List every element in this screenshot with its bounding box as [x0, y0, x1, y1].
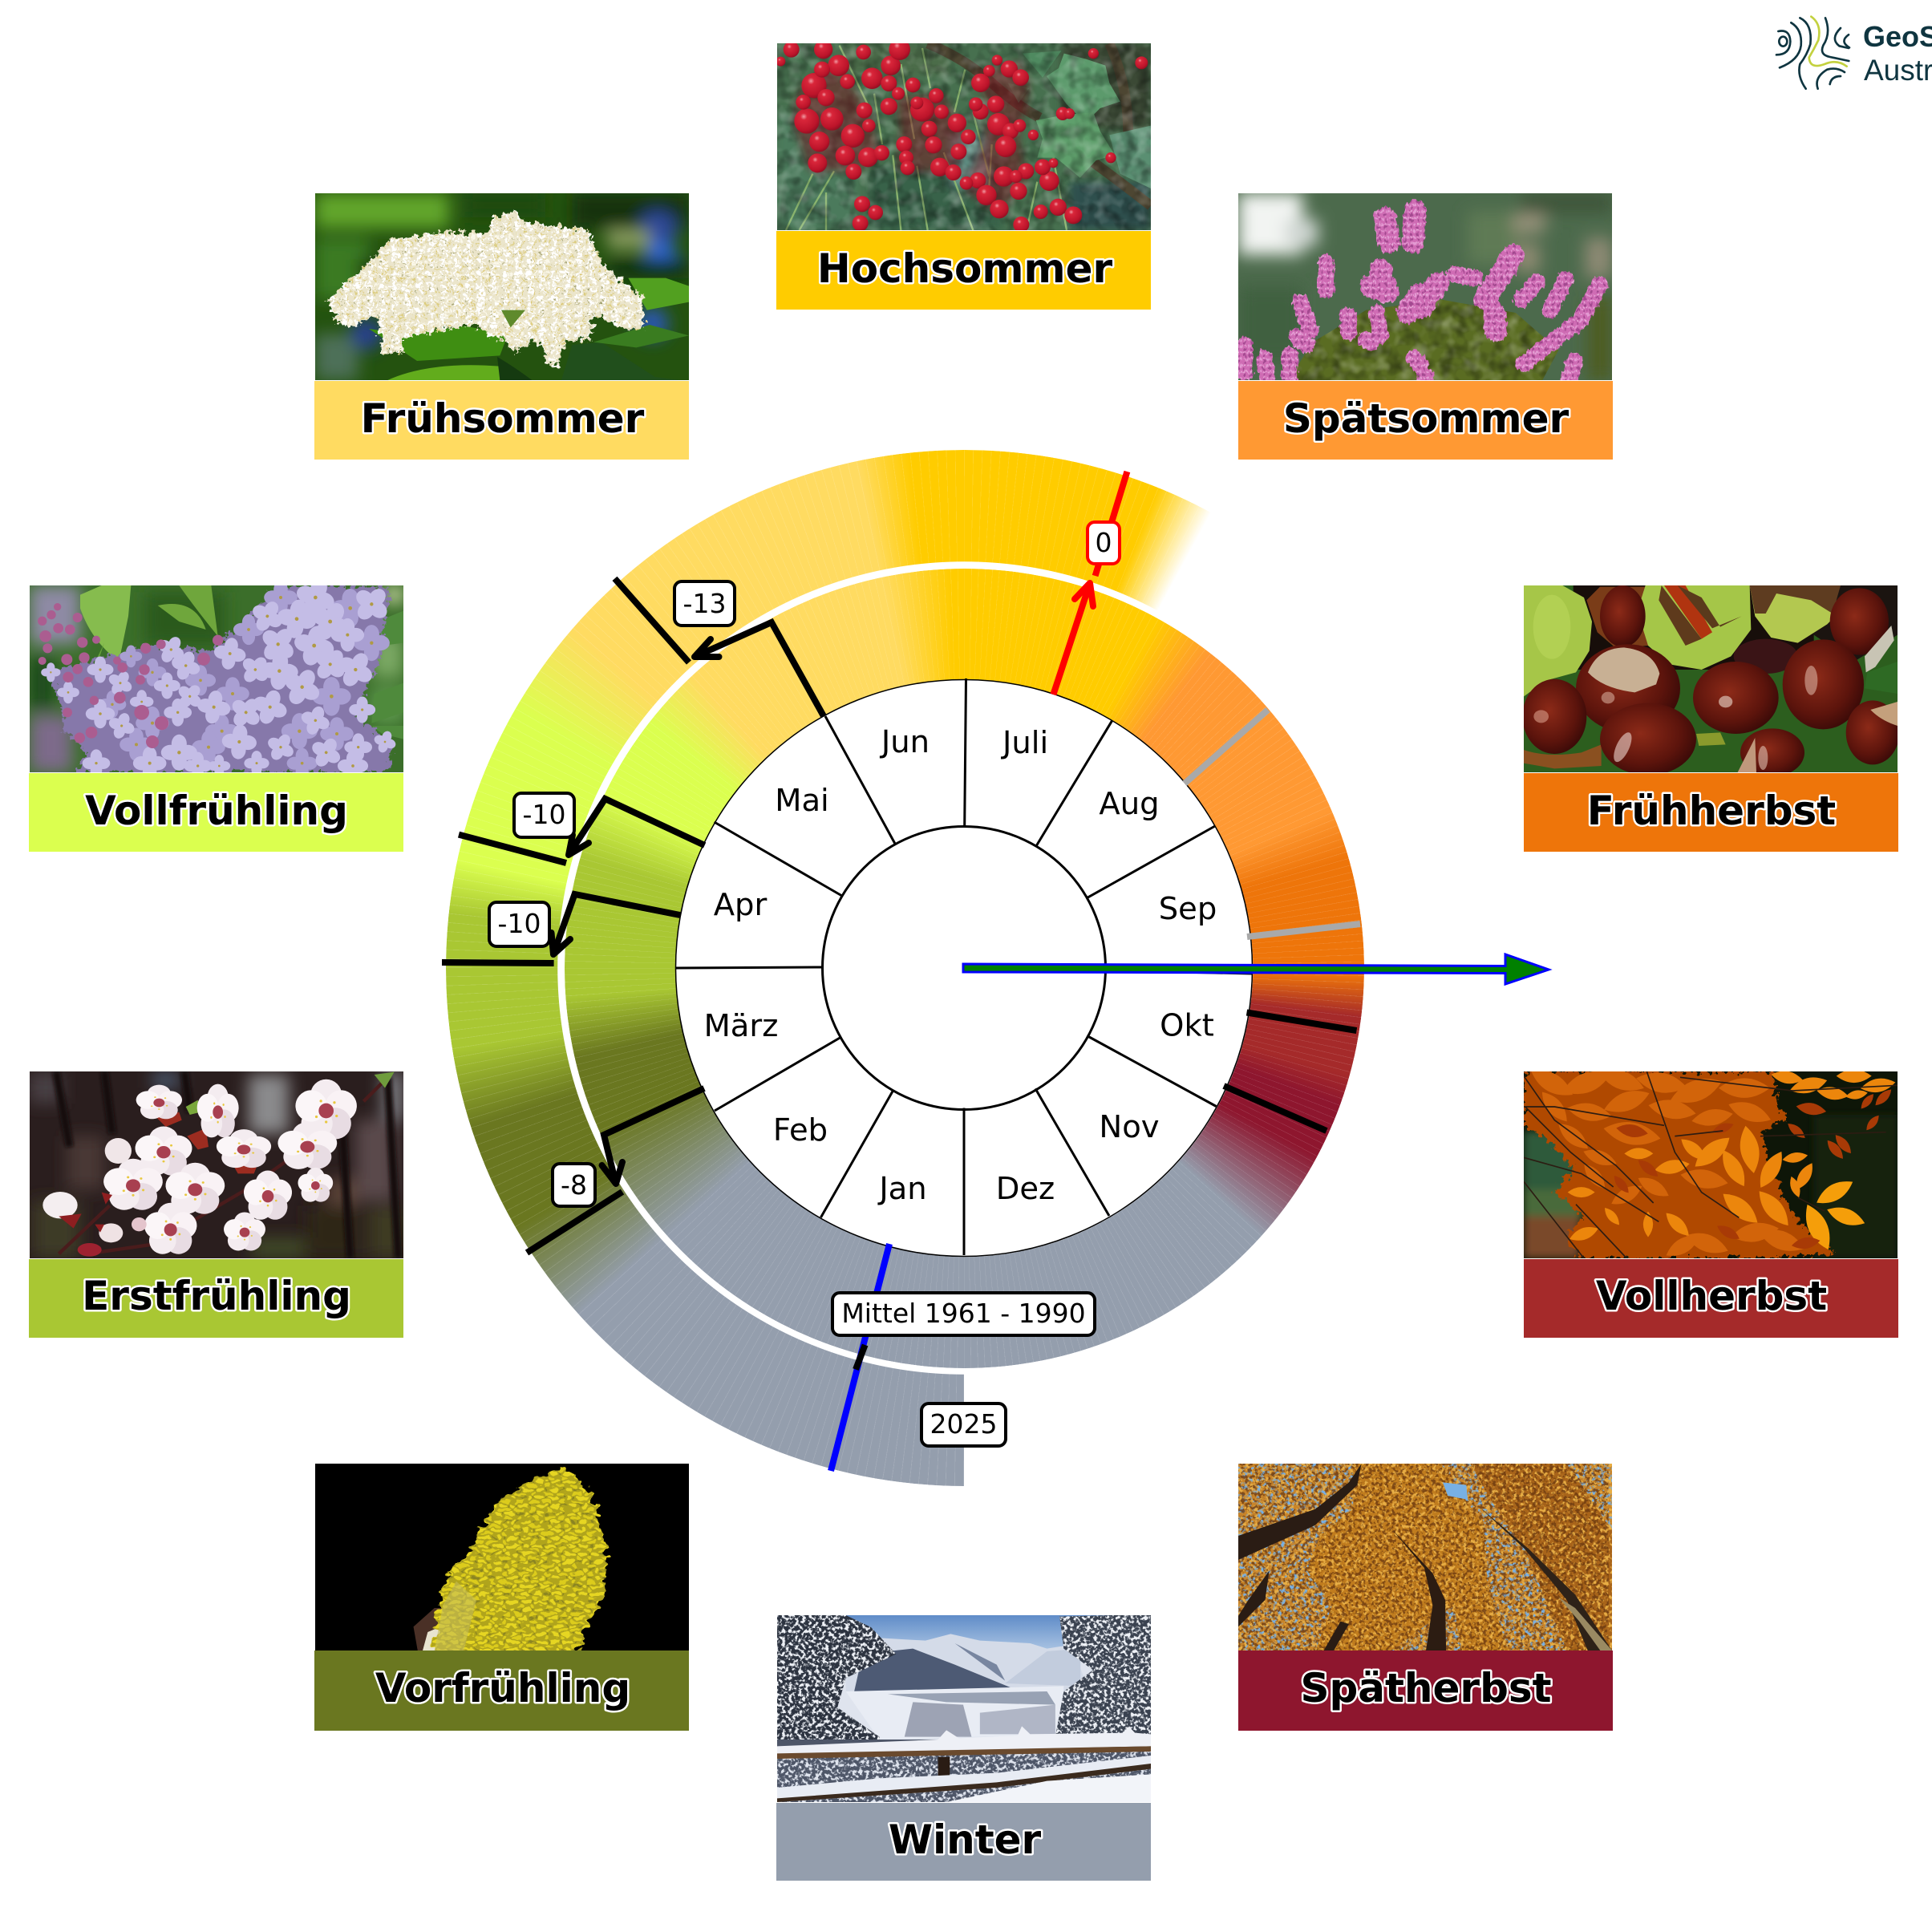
- month wheel: Sep: [1159, 891, 1217, 927]
- panel: Frühsommer: Frühsommer: [361, 395, 645, 442]
- panel: Vollfrühling: [29, 573, 403, 852]
- panel: Frühsommer: [314, 193, 689, 460]
- value label -8: -8: [561, 1169, 587, 1201]
- value label 0: [1088, 522, 1120, 564]
- value label -13: [674, 581, 735, 626]
- panel: Winter: Winter: [889, 1817, 1042, 1863]
- panel: Vollherbst: [1524, 1063, 1898, 1338]
- green vegetation arrow: [963, 954, 1549, 984]
- value label -13: -13: [683, 588, 726, 619]
- black autumn markers: [1224, 1012, 1357, 1131]
- label: Mittel 1961 - 1990: Mittel 1961 - 1990: [841, 1298, 1086, 1329]
- panel: Spätherbst: Spätherbst: [1300, 1665, 1552, 1711]
- panel: Vorfrühling: [314, 1464, 689, 1731]
- month wheel: [675, 678, 1253, 1256]
- month wheel: Juli: [1001, 725, 1048, 761]
- value label -10 Erstfrühling: -10: [498, 908, 541, 939]
- month wheel: Aug: [1099, 786, 1160, 822]
- month wheel: Jan: [877, 1171, 927, 1207]
- month wheel: Feb: [773, 1112, 828, 1148]
- marker arrow: Vollfrühling -10: [459, 799, 705, 863]
- month wheel: Mai: [775, 783, 829, 819]
- label: 2025: 2025: [930, 1408, 997, 1440]
- marker arrow: Erstfrühling -10: [442, 894, 680, 963]
- label: 2025: [921, 1403, 1006, 1446]
- month wheel: Okt: [1160, 1007, 1214, 1044]
- month wheel: Apr: [714, 887, 767, 923]
- marker arrow: Vorfrühling -8: [527, 1088, 704, 1253]
- panel: Vollfrühling: Vollfrühling: [85, 788, 348, 834]
- panel: Frühherbst: Frühherbst: [1587, 788, 1836, 834]
- panel: Spätsommer: [1238, 193, 1613, 460]
- month wheel: Dez: [996, 1171, 1055, 1207]
- marker arrow: Frühsommer -13: [614, 578, 824, 716]
- outer ring: 2025 seasons: [446, 450, 1209, 1486]
- value label -10 Erstfrühling: [489, 902, 549, 946]
- panel: Hochsommer: Hochsommer: [817, 245, 1112, 292]
- panel: Vorfrühling: Vorfrühling: [375, 1665, 630, 1711]
- month wheel: Nov: [1099, 1109, 1160, 1145]
- value label -8: [553, 1164, 595, 1206]
- grey season markers: [1185, 710, 1360, 937]
- panel: Spätsommer: Spätsommer: [1283, 395, 1569, 442]
- panel: Vollherbst: Vollherbst: [1596, 1273, 1827, 1319]
- inner ring: mean 1961-1990 seasons: [565, 568, 1363, 1368]
- value label -10 Vollfrühling: -10: [523, 799, 565, 830]
- winter marker line: [831, 1244, 889, 1471]
- panel: Frühherbst: [1522, 585, 1899, 852]
- panel: Hochsommer: [776, 38, 1151, 310]
- panel: Winter: [776, 1615, 1151, 1881]
- month wheel: März: [704, 1008, 778, 1044]
- value label -10 Vollfrühling: [514, 793, 574, 837]
- panel: Spätherbst: [1238, 1464, 1613, 1731]
- logo: GeoSphere Austria: [1776, 17, 1932, 89]
- panel: Erstfrühling: [29, 1071, 403, 1338]
- label: Mittel 1961 - 1990: [832, 1293, 1095, 1335]
- panel: Erstfrühling: Erstfrühling: [82, 1273, 351, 1319]
- marker arrow: Hochsommer 0: [1053, 472, 1127, 695]
- month wheel: Jun: [880, 724, 930, 760]
- value label 0: 0: [1096, 527, 1112, 558]
